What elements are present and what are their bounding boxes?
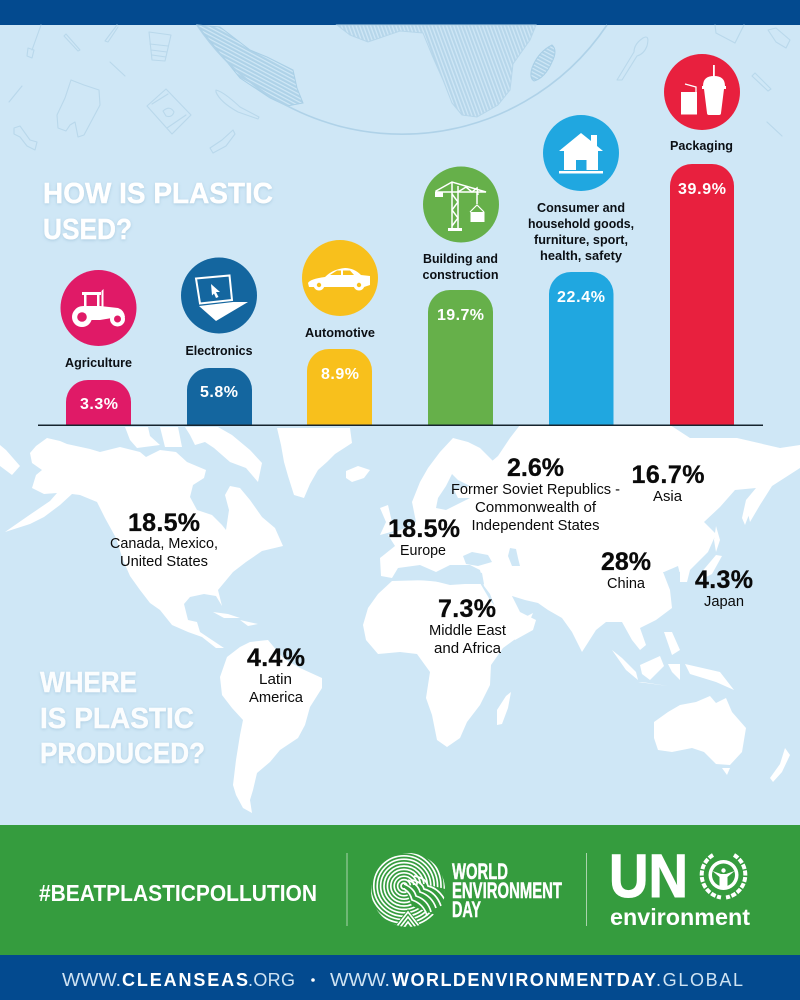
chart baseline <box>38 424 763 426</box>
region: middle east and africa: Middle East <box>429 623 506 639</box>
map: sakhalin and japan <box>696 488 758 582</box>
labels: usage categories: construction <box>422 267 499 282</box>
footer link: world environment day: WORLDENVIRONMENTDAY <box>392 970 656 990</box>
map: africa <box>363 580 533 747</box>
region: asia: Asia <box>653 489 683 505</box>
logo: wordmark: WORLD <box>452 859 508 884</box>
heading: how is plastic used <box>43 178 273 246</box>
labels: usage categories: Automotive <box>305 325 375 340</box>
logo: wordmark: DAY <box>452 897 481 922</box>
map: madagascar <box>497 692 511 725</box>
labels: usage categories: Packaging <box>670 138 733 153</box>
region: europe: 18.5% <box>388 515 460 543</box>
map: sea cutouts <box>392 474 680 608</box>
logo: wordmark <box>452 859 562 922</box>
bar: packaging <box>670 164 734 425</box>
logo: un emblem <box>702 855 745 898</box>
labels: usage categories: Building and <box>423 251 498 266</box>
region: latin america <box>247 644 305 706</box>
heading: where is plastic produced: IS PLASTIC <box>40 703 194 735</box>
icon: building crane <box>423 166 499 242</box>
bar: agriculture <box>66 380 131 425</box>
region: europe <box>388 515 460 559</box>
map: south america <box>220 640 322 813</box>
heading: how is plastic used: HOW IS PLASTIC <box>43 178 273 210</box>
bar: electronics <box>187 368 252 425</box>
heading: how is plastic used: USED? <box>43 214 132 246</box>
region: middle east and africa: 7.3% <box>438 595 496 623</box>
footer link: clean seas <box>62 970 295 990</box>
region: middle east and africa <box>429 595 506 657</box>
labels: usage categories: Agriculture <box>65 355 132 370</box>
icon: automotive car <box>302 240 378 316</box>
region: asia <box>632 461 704 505</box>
labels: usage categories <box>65 138 733 370</box>
map: eurasia <box>380 425 800 652</box>
region: former soviet republics: Former Soviet Republics - <box>451 482 620 498</box>
map: australia <box>654 696 746 765</box>
footer band: navy <box>0 955 800 1000</box>
bar: agriculture: 3.3% <box>80 396 118 413</box>
heading: where is plastic produced: WHERE <box>40 667 137 699</box>
footer separator dot <box>311 978 315 982</box>
bar: consumer goods: 22.4% <box>557 289 605 306</box>
footer link: world environment day <box>330 970 743 990</box>
labels: usage categories: household goods, <box>528 216 634 231</box>
icon: agriculture tractor <box>60 270 136 346</box>
footer link: world environment day: WWW. <box>330 970 390 990</box>
region: japan: 4.3% <box>695 566 753 594</box>
map: iceland <box>346 466 370 482</box>
region: north america: Canada, Mexico, <box>110 536 218 552</box>
bar: automotive: 8.9% <box>321 366 359 383</box>
labels: usage categories: Consumer and <box>537 200 625 215</box>
region: china: 28% <box>601 548 651 576</box>
footer link: clean seas: CLEANSEAS <box>122 970 248 990</box>
icon: consumer house <box>543 115 619 191</box>
region: japan <box>695 566 753 610</box>
icon: electronics laptop <box>181 258 257 334</box>
map: uk <box>380 505 398 535</box>
region: former soviet republics: Commonwealth of <box>475 500 597 516</box>
region: asia: 16.7% <box>632 461 704 489</box>
bar: consumer goods <box>549 272 614 425</box>
map: southeast asia <box>612 632 734 690</box>
bar: building and construction <box>428 290 493 425</box>
labels: usage categories: furniture, sport, <box>534 232 628 247</box>
logo: wordmark: ENVIRONMENT <box>452 878 562 903</box>
labels: usage categories: Electronics <box>186 343 252 358</box>
region: north america: United States <box>120 554 208 570</box>
top bar <box>0 0 800 25</box>
map: north america <box>5 438 283 648</box>
footer band: green <box>0 825 800 955</box>
globe sketch <box>197 25 607 134</box>
region: latin america: Latin <box>259 672 292 688</box>
bar: packaging: 39.9% <box>678 181 726 198</box>
region: north america: 18.5% <box>128 509 200 537</box>
region: china <box>601 548 651 592</box>
heading: where is plastic produced: PRODUCED? <box>40 738 205 770</box>
bar: electronics: 5.8% <box>200 384 238 401</box>
divider right <box>586 853 587 926</box>
logo: un environment: environment <box>610 904 750 930</box>
world map <box>0 425 800 813</box>
region: europe: Europe <box>400 543 446 559</box>
map: new zealand and tasmania <box>722 748 790 782</box>
region: middle east and africa: and Africa <box>434 641 502 657</box>
labels: usage categories: health, safety <box>540 248 623 263</box>
region: former soviet republics: 2.6% <box>507 454 564 482</box>
divider left <box>346 853 348 926</box>
logo: un environment: UN <box>609 842 688 910</box>
region: latin america: 4.4% <box>247 644 305 672</box>
map: caribbean <box>213 612 258 626</box>
footer link: world environment day: .GLOBAL <box>656 970 743 990</box>
map: aleutian tip <box>0 445 20 475</box>
footer link: clean seas: .ORG <box>248 970 295 990</box>
logo: world environment day <box>371 853 562 927</box>
region: latin america: America <box>249 690 304 706</box>
heading: where is plastic produced <box>40 667 205 770</box>
logo: fingerprint <box>371 853 445 927</box>
region: former soviet republics: Independent States <box>472 518 600 534</box>
region: china: China <box>607 576 646 592</box>
icon: packaging cups <box>664 54 740 130</box>
footer link: clean seas: WWW. <box>62 970 121 990</box>
region: japan: Japan <box>704 594 744 610</box>
map: arctic islands <box>125 427 262 482</box>
region: north america <box>110 509 218 570</box>
bar: automotive <box>307 349 372 425</box>
doodles: plastic litter <box>9 25 790 153</box>
hashtag: #BEATPLASTICPOLLUTION <box>39 880 317 906</box>
bar: building and construction: 19.7% <box>437 307 484 324</box>
map: greenland <box>277 428 352 498</box>
logo: un environment <box>609 842 750 930</box>
bar chart: how plastic is used <box>66 164 734 425</box>
region: former soviet republics <box>451 454 620 534</box>
